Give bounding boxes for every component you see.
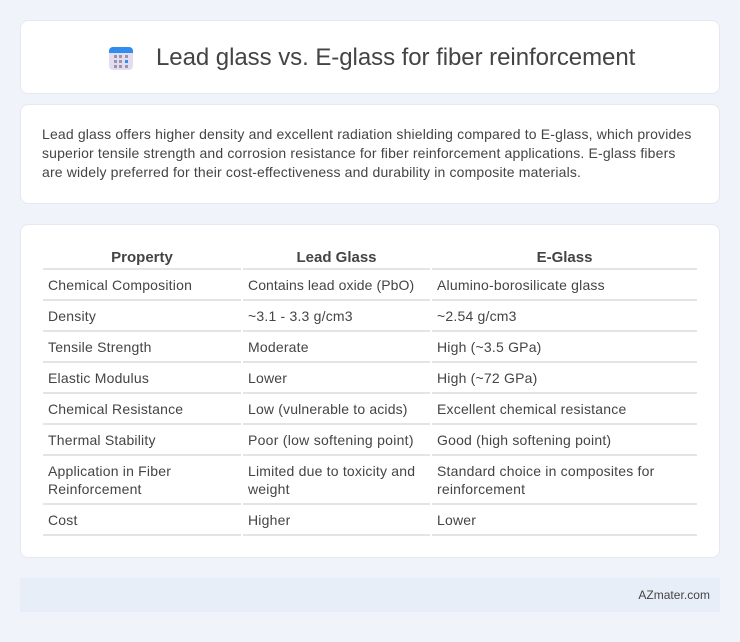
- icon: calendar: [109, 47, 133, 70]
- comparison table: High (~72 GPa): [437, 370, 537, 386]
- comparison table: Good (high softening point): [437, 432, 611, 448]
- comparison table: Reinforcement: [48, 481, 142, 497]
- comparison table: Contains lead oxide (PbO): [248, 277, 414, 293]
- intro panel: [20, 104, 720, 204]
- comparison table: Lower: [437, 512, 476, 528]
- comparison table: Alumino-borosilicate glass: [437, 277, 605, 293]
- comparison table: Application in Fiber: [48, 463, 171, 479]
- comparison table: Lead Glass: [296, 249, 377, 266]
- title: Lead glass vs. E-glass for fiber reinforcement: [156, 44, 635, 71]
- intro text: superior tensile strength and corrosion resistance for fiber reinforcement applications. E-glass fibers: [42, 145, 676, 161]
- comparison table: Higher: [248, 512, 290, 528]
- comparison table: Property: [111, 249, 173, 266]
- comparison table: weight: [248, 481, 290, 497]
- footer bar: [20, 578, 720, 612]
- comparison table: Standard choice in composites for: [437, 463, 654, 479]
- comparison table: Moderate: [248, 339, 309, 355]
- header card: [20, 20, 720, 94]
- comparison table: Limited due to toxicity and: [248, 463, 415, 479]
- comparison table: Poor (low softening point): [248, 432, 414, 448]
- comparison table: Low (vulnerable to acids): [248, 401, 408, 417]
- comparison table: ~3.1 - 3.3 g/cm3: [248, 308, 353, 324]
- comparison table: Lower: [248, 370, 287, 386]
- comparison table: Elastic Modulus: [48, 370, 149, 386]
- comparison table: High (~3.5 GPa): [437, 339, 542, 355]
- comparison table: Chemical Composition: [48, 277, 192, 293]
- comparison table: E-Glass: [537, 249, 592, 266]
- comparison table: Tensile Strength: [48, 339, 152, 355]
- comparison table: reinforcement: [437, 481, 525, 497]
- intro text: Lead glass offers higher density and excellent radiation shielding compared to E-glass, which provides: [42, 126, 692, 142]
- intro text: [42, 126, 692, 180]
- table panel: [20, 224, 720, 558]
- comparison table: Thermal Stability: [48, 432, 156, 448]
- comparison table: Density: [48, 308, 96, 324]
- intro text: are widely preferred for their cost-effectiveness and durability in composite materials.: [42, 164, 581, 180]
- comparison table: Excellent chemical resistance: [437, 401, 626, 417]
- comparison table: Cost: [48, 512, 78, 528]
- comparison table: ~2.54 g/cm3: [437, 308, 517, 324]
- footer source text: AZmater.com: [638, 588, 710, 602]
- comparison table: Chemical Resistance: [48, 401, 183, 417]
